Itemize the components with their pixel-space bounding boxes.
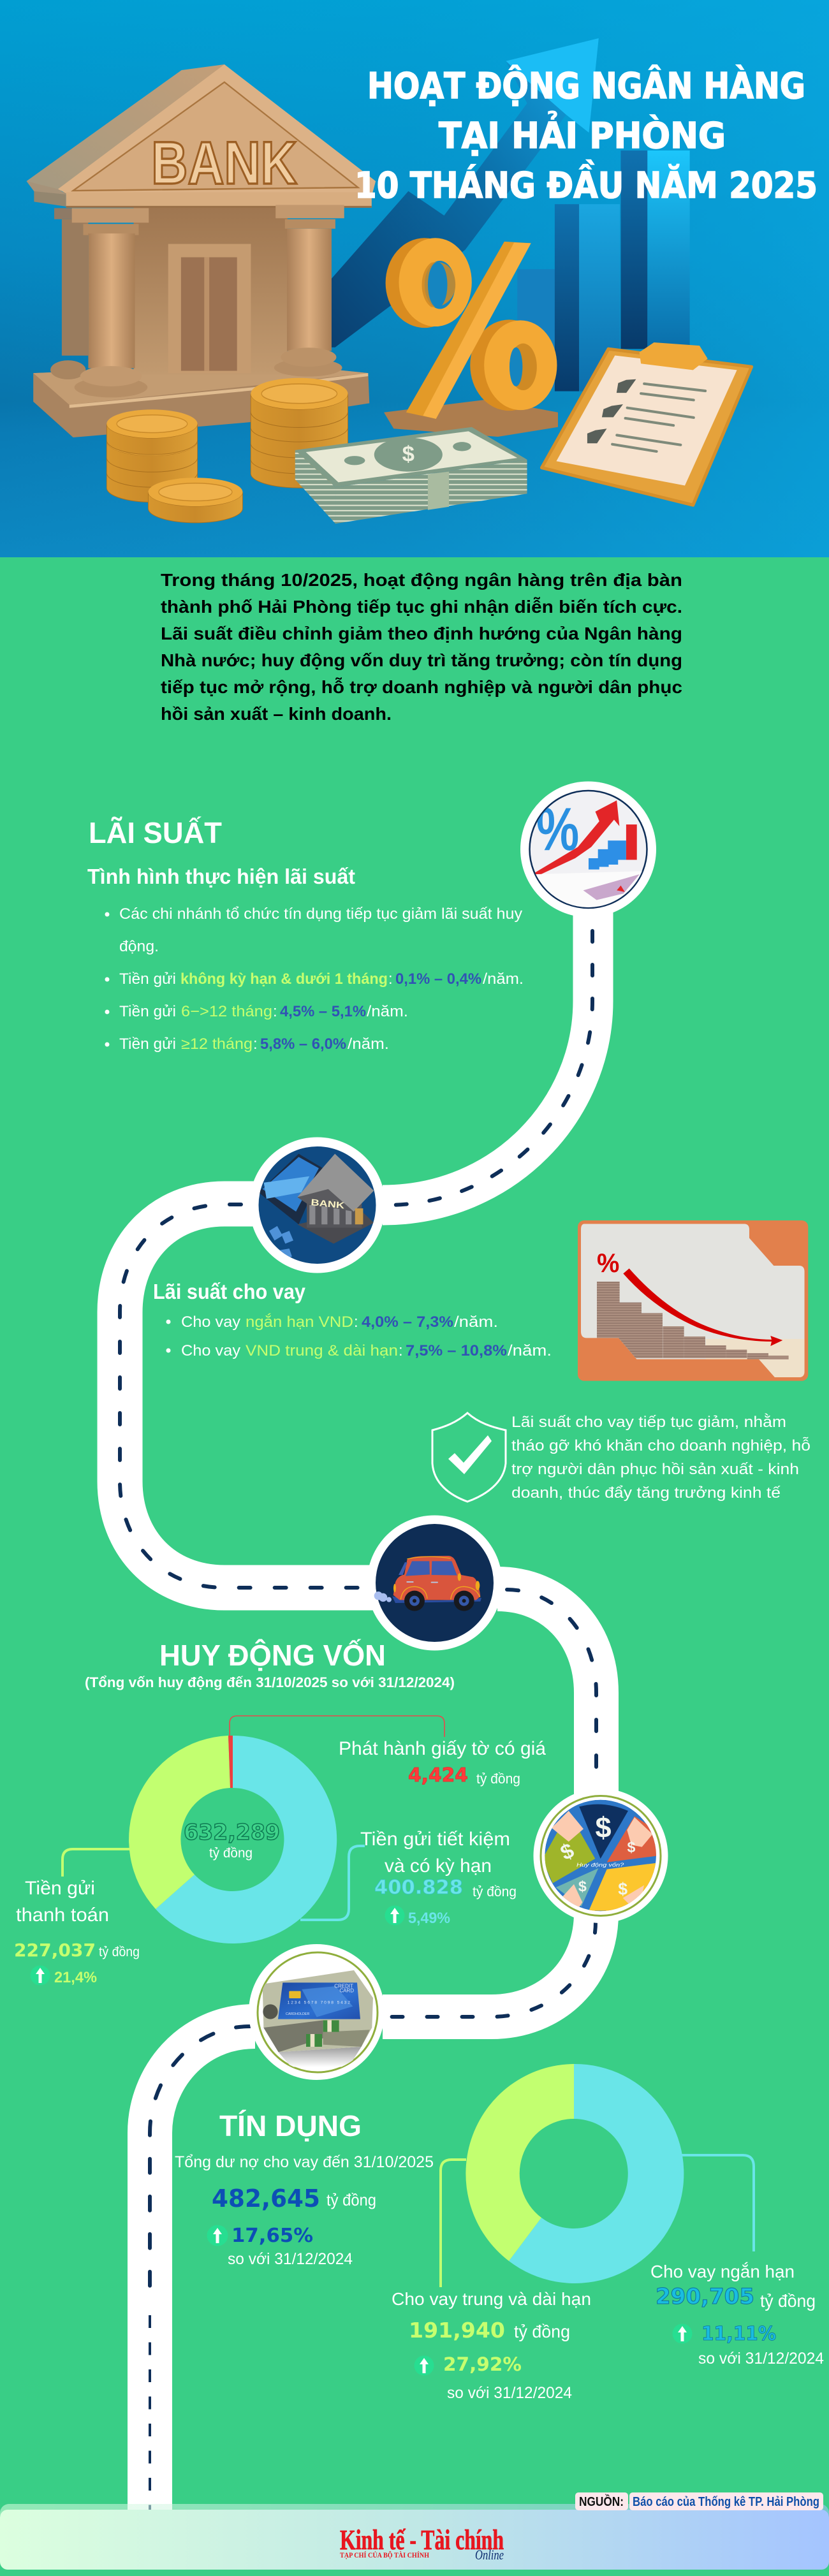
icon: credit card medallion (249, 1944, 385, 2080)
label: short term loans: tỷ đồng (760, 2291, 816, 2311)
intro paragraph: hồi sản xuất – kinh doanh. (161, 704, 392, 724)
chart centre total: tỷ đồng (209, 1846, 253, 1861)
label: short term loans: so với 31/12/2024 (698, 2350, 824, 2367)
hero: percent sign, money and clipboard: $ (402, 442, 414, 466)
bullet list: lending rates: /năm. (454, 1314, 498, 1331)
bullet list: deposit rates (105, 905, 524, 1053)
bullet list: lending rates: : (354, 1314, 358, 1331)
subheading: tình hình thực hiện: Tình hình thực hiện lãi suất (87, 865, 355, 888)
label: term savings deposits: tỷ đồng (473, 1884, 517, 1899)
bullet list: deposit rates: /năm. (367, 1003, 408, 1020)
label: term savings deposits: và có kỳ hạn (385, 1855, 492, 1877)
icon: money wheel medallion (533, 1789, 668, 1923)
label: short term loans: 290,705 (656, 2284, 754, 2309)
intro paragraph (161, 570, 682, 724)
subheading: capital note: (Tổng vốn huy động đến 31/10/2025 so với 31/12/2024) (85, 1674, 455, 1690)
bullet list: deposit rates: Các chi nhánh tổ chức tín dụng tiếp tục giảm lãi suất huy (119, 905, 522, 923)
hero: bank building (27, 64, 376, 437)
intro paragraph: thành phố Hải Phòng tiếp tục ghi nhận diễn biến tích cực. (161, 597, 682, 617)
bullet list: lending rates (166, 1314, 552, 1359)
callout: lending rate comment (511, 1414, 811, 1502)
source tag (575, 2492, 823, 2510)
icon: money wheel medallion: $ (595, 1811, 612, 1844)
icon: bank and tablet medallion: BANK (311, 1197, 346, 1211)
bullet list: lending rates: : (399, 1342, 403, 1359)
icon: credit card medallion: CREDIT (334, 1983, 353, 1989)
label: total outstanding loans: 482,645 (212, 2184, 320, 2213)
winding road (120, 905, 596, 2510)
label: medium and long term loans: 191,940 (409, 2318, 505, 2343)
label: term savings deposits: 5,49% (408, 1910, 450, 1927)
donut chart: credit (466, 2064, 684, 2283)
bullet list: deposit rates: 5,8% – 6,0% (260, 1036, 346, 1053)
label: valuable papers: 4,424 (408, 1764, 468, 1787)
label: total outstanding loans: Tổng dư nợ cho vay đến 31/10/2025 (175, 2153, 434, 2171)
heading: lãi suất: LÃI SUẤT (89, 816, 222, 849)
title (355, 66, 818, 207)
label: term savings deposits (360, 1829, 517, 1927)
icon: credit card medallion: CARD (339, 1987, 354, 1993)
section: huy động vốn (85, 1639, 455, 1690)
icon: percent chart medallion: % (536, 795, 579, 863)
label: valuable papers: tỷ đồng (476, 1771, 520, 1787)
hero: percent sign, money and clipboard (295, 238, 752, 523)
label: short term loans: Cho vay ngắn hạn (650, 2262, 795, 2281)
label: total outstanding loans: 17,65% (231, 2225, 313, 2247)
label: short term loans (650, 2262, 824, 2367)
icon: money wheel medallion: Huy động vốn? (576, 1862, 624, 1868)
icon: money wheel medallion: $ (578, 1878, 587, 1895)
source tag: NGUỒN: (579, 2494, 624, 2509)
label: medium and long term loans: so với 31/12/2024 (447, 2384, 572, 2402)
subheading: lãi suất cho vay: Lãi suất cho vay (153, 1280, 306, 1303)
label: medium and long term loans: tỷ đồng (514, 2322, 570, 2341)
label: term savings deposits: Tiền gửi tiết kiệm (360, 1829, 510, 1850)
bullet list: lending rates: VND trung & dài hạn (246, 1342, 398, 1359)
label: medium and long term loans (392, 2289, 591, 2402)
intro paragraph: Trong tháng 10/2025, hoạt động ngân hàng trên địa bàn (161, 570, 682, 590)
bullet list: deposit rates: 0,1% – 0,4% (395, 970, 481, 988)
heading: huy động vốn: HUY ĐỘNG VỐN (159, 1639, 386, 1672)
bullet list: lending rates: 4,0% – 7,3% (362, 1314, 453, 1331)
hero: coin stacks (106, 378, 348, 523)
hero: rising arrow and bars (331, 38, 690, 392)
chart centre total (184, 1820, 280, 1861)
logo: Kinh tế - Tài chính Online: Online (475, 2547, 504, 2563)
icon: credit card medallion: 1234 5678 7098 5432 (288, 2000, 350, 2005)
intro paragraph: Lãi suất điều chỉnh giảm theo định hướng của Ngân hàng (161, 624, 682, 643)
bullet list: lending rates: /năm. (508, 1342, 552, 1359)
chart centre total: 632,289 (184, 1820, 280, 1845)
callout: lending rate comment: trợ người dân phục hồi sản xuất - kinh (511, 1461, 799, 1478)
bullet list: deposit rates: /năm. (483, 970, 524, 988)
icon: money wheel medallion: $ (618, 1880, 627, 1899)
section: lãi suất (87, 816, 524, 1053)
bullet list: lending rates: Cho vay (181, 1342, 240, 1359)
label: demand deposits: thanh toán (16, 1905, 109, 1926)
callout: lending rate comment: doanh, thúc đẩy tăng trưởng kinh tế (511, 1484, 781, 1502)
icon: money wheel medallion: $ (627, 1839, 635, 1855)
bullet list: deposit rates: : (253, 1036, 258, 1053)
heading: tín dụng: TÍN DỤNG (219, 2109, 362, 2142)
bullet list: lending rates: Cho vay (181, 1314, 240, 1331)
label: term savings deposits: 400.828 (374, 1877, 463, 1899)
image: falling interest rate coins: % (597, 1248, 619, 1278)
bullet list: deposit rates: : (388, 970, 393, 988)
label: demand deposits (14, 1878, 140, 1986)
bullet list: deposit rates: Tiền gửi (119, 970, 176, 988)
footer band (0, 2492, 829, 2570)
label: total outstanding loans (175, 2153, 434, 2268)
label: total outstanding loans: tỷ đồng (326, 2190, 376, 2209)
label: demand deposits: 227,037 (14, 1940, 96, 1961)
label: short term loans: 11,11% (701, 2323, 776, 2345)
label: medium and long term loans: 27,92% (443, 2353, 522, 2375)
title: TẠI HẢI PHÒNG (439, 112, 726, 157)
bullet list: deposit rates: : (273, 1003, 277, 1020)
section: tín dụng (175, 2109, 434, 2268)
callout: lending rate comment: tháo gỡ khó khăn cho doanh nghiệp, hỗ (511, 1437, 811, 1454)
bullet list: deposit rates: động. (119, 938, 159, 955)
intro paragraph: Nhà nước; huy động vốn duy trì tăng trưởng; còn tín dụng (161, 650, 682, 670)
bullet list: deposit rates: 6−>12 tháng (181, 1003, 272, 1020)
label: medium and long term loans: Cho vay trung và dài hạn (392, 2289, 591, 2309)
label: valuable papers: Phát hành giấy tờ có giá (339, 1738, 546, 1759)
intro paragraph: tiếp tục mở rộng, hỗ trợ doanh nghiệp và người dân phục (161, 677, 682, 697)
connector lines: capital donut (62, 1716, 444, 1920)
bullet list: deposit rates: 4,5% – 5,1% (280, 1003, 366, 1020)
label: total outstanding loans: so với 31/12/2024 (228, 2250, 353, 2268)
label: valuable papers (339, 1738, 546, 1787)
icon: credit card medallion: CARDHOLDER (286, 2012, 309, 2016)
icon: shield with check (432, 1413, 506, 1502)
image: falling interest rate coins (578, 1220, 808, 1381)
connector lines: credit donut (441, 2155, 754, 2287)
logo: Kinh tế - Tài chính Online: Kinh tế - Tài chính (340, 2524, 504, 2556)
bullet list: lending rates: ngắn hạn VND (246, 1314, 353, 1331)
label: demand deposits: Tiền gửi (25, 1878, 95, 1899)
bullet list: deposit rates: Tiền gửi (119, 1036, 176, 1053)
label: demand deposits: tỷ đồng (99, 1945, 140, 1959)
icon: percent chart medallion (520, 782, 656, 917)
logo: Kinh tế - Tài chính Online (340, 2524, 504, 2563)
bullet list: deposit rates: /năm. (348, 1036, 389, 1053)
hero: bank building: BANK (151, 130, 297, 197)
logo: Kinh tế - Tài chính Online: TẠP CHÍ CỦA BỘ TÀI CHÍNH (340, 2550, 430, 2559)
label: demand deposits: 21,4% (54, 1969, 97, 1986)
icon: bank and tablet medallion (249, 1138, 385, 1273)
bullet list: deposit rates: không kỳ hạn & dưới 1 tháng (180, 970, 388, 988)
callout: lending rate comment: Lãi suất cho vay tiếp tục giảm, nhằm (511, 1414, 786, 1431)
bullet list: deposit rates: ≥12 tháng (181, 1036, 253, 1053)
subsection: lãi suất cho vay (153, 1280, 552, 1359)
icon: car medallion (367, 1515, 503, 1650)
hero banner (0, 0, 829, 557)
bullet list: deposit rates: Tiền gửi (119, 1003, 176, 1020)
icon: money wheel medallion: $ (557, 1839, 578, 1865)
donut chart: capital mobilisation (129, 1736, 337, 1943)
bullet list: lending rates: 7,5% – 10,8% (406, 1342, 507, 1359)
